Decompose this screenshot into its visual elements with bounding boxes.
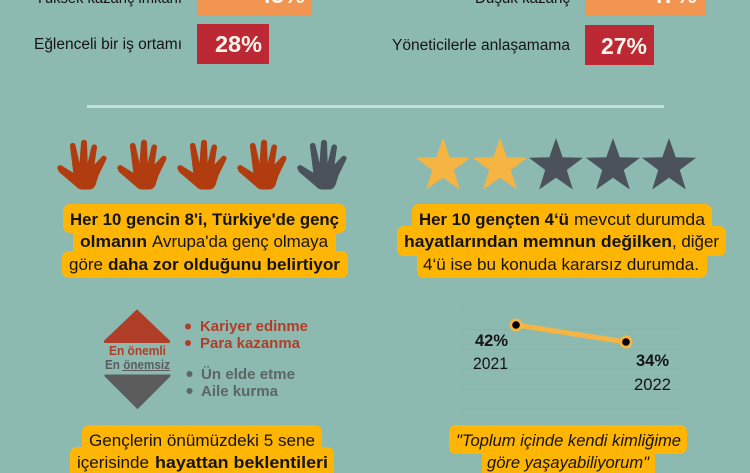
list: least important: Ün elde etme bbox=[201, 366, 295, 383]
bar: 45% bbox=[197, 0, 312, 15]
value: 34%: 34% bbox=[636, 352, 669, 370]
callout: Türkiye'de genç olmak: Her 10 gencin 8'i, Türkiye'de genç bbox=[70, 211, 339, 229]
label: Yöneticilerle anlaşamama: Yöneticilerle anlaşamama bbox=[392, 37, 570, 54]
bar: 28% bbox=[197, 24, 269, 64]
bar: 28%: 28% bbox=[215, 31, 262, 57]
callout: hayatlarından memnun değil bbox=[397, 204, 726, 278]
list: most important bbox=[185, 318, 308, 352]
callout: hayattan beklentiler: içerisinde bbox=[77, 454, 149, 472]
year: 2022: 2022 bbox=[634, 375, 671, 394]
line chart: 2021-2022 bbox=[462, 310, 680, 410]
bar: 47% bbox=[585, 0, 705, 16]
list: least important bbox=[186, 366, 295, 400]
bar: 27%: 27% bbox=[601, 33, 647, 59]
callout: kimlik alıntısı: "Toplum içinde kendi kimliğime bbox=[456, 432, 681, 450]
callout: hayatlarından memnun değil: Her 10 gençten 4‘ü bbox=[419, 211, 569, 229]
callout: hayatlarından memnun değil: mevcut durumda bbox=[574, 211, 706, 229]
bar: 27% bbox=[585, 25, 654, 65]
callout: hayattan beklentiler: Gençlerin önümüzdeki 5 sene bbox=[89, 432, 315, 450]
callout: hayatlarından memnun değil: 4‘ü ise bu konuda kararsız durumda. bbox=[423, 256, 699, 274]
callout: Türkiye'de genç olmak: göre bbox=[69, 256, 103, 274]
callout: Türkiye'de genç olmak bbox=[62, 204, 348, 278]
list: most important: Para kazanma bbox=[200, 335, 301, 352]
data point: 2021 bbox=[510, 318, 522, 332]
value: 42%: 42% bbox=[475, 332, 508, 350]
icon: up triangle bbox=[104, 310, 170, 342]
icon: five hands, four highlighted bbox=[57, 140, 347, 190]
callout: Türkiye'de genç olmak: Avrupa'da genç olmaya bbox=[152, 233, 329, 251]
callout: kimlik alıntısı bbox=[449, 425, 687, 473]
panel: right top bars bbox=[392, 0, 705, 65]
label: Eğlenceli bir iş ortamı: Eğlenceli bir iş ortamı bbox=[34, 36, 182, 53]
icon: five stars, two highlighted bbox=[416, 138, 696, 190]
callout: Türkiye'de genç olmak: olmanın bbox=[80, 233, 147, 251]
data point: 2022 bbox=[620, 336, 632, 348]
callout: Türkiye'de genç olmak: daha zor olduğunu belirtiyor bbox=[108, 256, 341, 274]
callout: kimlik alıntısı: göre yaşayabiliyorum" bbox=[487, 454, 650, 472]
label: En önemli: En önemli bbox=[109, 344, 166, 358]
callout: hayatlarından memnun değil: , diğer bbox=[672, 233, 720, 251]
callout: hayatlarından memnun değil: hayatlarından memnun değilken bbox=[404, 233, 672, 251]
icon: down triangle bbox=[105, 375, 170, 408]
diagram: en önemli / en önemsiz bbox=[104, 310, 170, 408]
callout: hayattan beklentiler: hayattan beklentileri bbox=[155, 454, 328, 472]
panel: left top bars bbox=[34, 0, 312, 64]
year: 2021: 2021 bbox=[473, 354, 508, 373]
list: least important: Aile kurma bbox=[201, 383, 279, 400]
callout: hayattan beklentiler bbox=[70, 425, 334, 473]
label: En önemsiz: En önemsiz bbox=[105, 358, 170, 372]
list: most important: Kariyer edinme bbox=[200, 318, 308, 335]
